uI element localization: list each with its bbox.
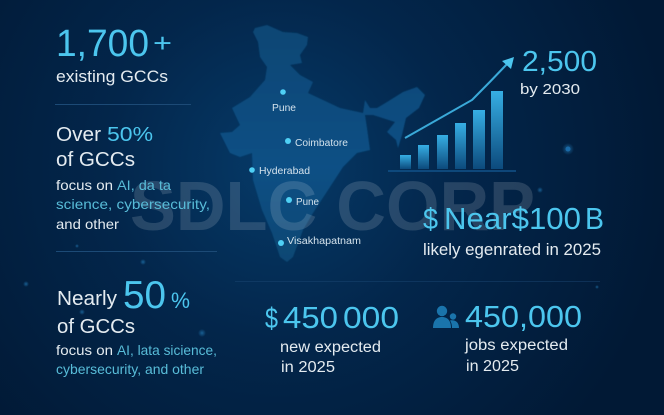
stat: over 50% of GCCs: focus on: [56, 177, 113, 193]
stat: 1,700+ existing GCCs: +: [153, 28, 172, 58]
stat: nearly 50% of GCCs: AI, lata sicience,: [117, 342, 217, 358]
stat: 450,000 jobs expected: in 2025: [466, 358, 519, 375]
stat: 2,500 by 2030: by 2030: [520, 81, 580, 98]
stat: near $100B: B: [585, 201, 604, 236]
stat: 450,000 jobs expected: [464, 299, 582, 375]
dividers: [55, 104, 600, 282]
city: Visakhapatnam: Visakhapatnam: [287, 236, 361, 247]
stat: nearly 50% of GCCs: 50: [123, 274, 166, 317]
stat: over 50% of GCCs: [56, 124, 210, 232]
stat: 450,000 jobs expected: 450,000: [465, 299, 582, 334]
stat: nearly 50% of GCCs: focus on: [56, 342, 113, 358]
stat: 450,000 jobs expected: jobs expected: [464, 337, 568, 354]
city: Pune south: Pune: [296, 197, 319, 208]
stat: 1,700+ existing GCCs: [56, 23, 172, 86]
stat: 450 000 new expected: [265, 300, 399, 376]
city markers: [249, 89, 361, 247]
stat: 2,500 by 2030: [520, 46, 597, 98]
stat: over 50% of GCCs: AI, da ta: [117, 177, 171, 193]
stat: 450 000 new expected: new expected: [280, 339, 381, 356]
growth arrow: [405, 57, 514, 138]
stat: over 50% of GCCs: of GCCs: [56, 149, 135, 171]
stat: nearly 50% of GCCs: [56, 274, 217, 377]
city: Pune north: Pune: [272, 103, 296, 114]
stat: nearly 50% of GCCs: Nearly: [57, 288, 117, 310]
stat: 450 000 new expected: $: [265, 303, 278, 335]
stat: nearly 50% of GCCs: cybersecurity, and other: [56, 361, 204, 377]
stat: 450 000 new expected: 000: [343, 300, 399, 335]
stat: over 50% of GCCs: science, cybersecurity,: [56, 196, 210, 212]
icon: people: [433, 306, 459, 328]
bar chart with growth arrow: [388, 57, 516, 171]
background glow dots: [23, 143, 599, 337]
stat: near $100B: [423, 201, 604, 259]
stat: nearly 50% of GCCs: %: [171, 288, 190, 313]
stat: over 50% of GCCs: and other: [56, 216, 119, 232]
city: Coimbatore: Coimbatore: [295, 138, 348, 149]
watermark: SDLC CORP: [130, 167, 535, 245]
stat: over 50% of GCCs: 50%: [107, 124, 153, 146]
city: Hyderabad: Hyderabad: [259, 166, 310, 177]
map of India: [220, 25, 425, 262]
stat: near $100B: $: [423, 203, 438, 236]
city: Pune south: [286, 197, 319, 208]
stat: 450 000 new expected: in 2025: [281, 359, 335, 376]
stat: over 50% of GCCs: Over: [56, 124, 101, 146]
stat: nearly 50% of GCCs: of GCCs: [57, 316, 135, 338]
stat: 2,500 by 2030: 2,500: [522, 46, 597, 78]
stat: near $100B: likely egenrated in 2025: [423, 241, 601, 259]
stat: near $100B: Near$100: [444, 201, 581, 236]
city: Pune north: [272, 89, 296, 114]
stat: 1,700+ existing GCCs: existing GCCs: [56, 68, 168, 86]
stat: 1,700+ existing GCCs: 1,700: [56, 23, 149, 65]
stat: 450 000 new expected: 450: [283, 300, 338, 335]
